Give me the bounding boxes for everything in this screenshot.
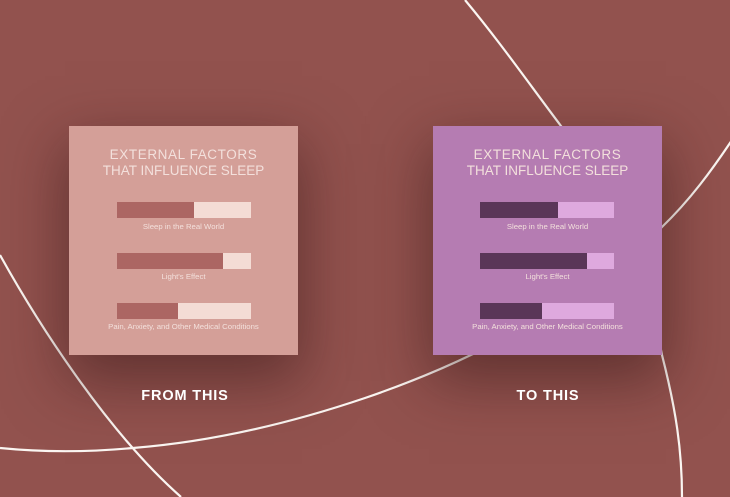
- label: sleep in the real world: Sleep in the Real World: [507, 222, 588, 231]
- label: pain, anxiety: Pain, Anxiety, and Other Medical Conditions: [108, 322, 259, 331]
- caption: from this: FROM THIS: [141, 388, 229, 404]
- bar: light's effect: [116, 252, 250, 268]
- heading: THAT INFLUENCE SLEEP: [103, 163, 264, 178]
- label: pain, anxiety: Pain, Anxiety, and Other Medical Conditions: [472, 322, 623, 331]
- label: sleep in the real world: Sleep in the Real World: [143, 222, 224, 231]
- bar: light's effect: [480, 252, 614, 268]
- panel: to this: [433, 126, 662, 355]
- panel: from this: [69, 126, 298, 355]
- heading: EXTERNAL FACTORS: [474, 147, 621, 162]
- bar: sleep in the real world: [480, 202, 614, 218]
- label: light's effect: Light's Effect: [162, 272, 206, 281]
- caption: to this: TO THIS: [517, 388, 579, 404]
- heading: [103, 147, 264, 178]
- label: light's effect: Light's Effect: [526, 272, 570, 281]
- bar: sleep in the real world: [116, 202, 250, 218]
- heading: EXTERNAL FACTORS: [110, 147, 257, 162]
- heading: THAT INFLUENCE SLEEP: [467, 163, 628, 178]
- bar: pain, anxiety: [116, 303, 250, 319]
- heading: [467, 147, 628, 178]
- bar: pain, anxiety: [480, 303, 614, 319]
